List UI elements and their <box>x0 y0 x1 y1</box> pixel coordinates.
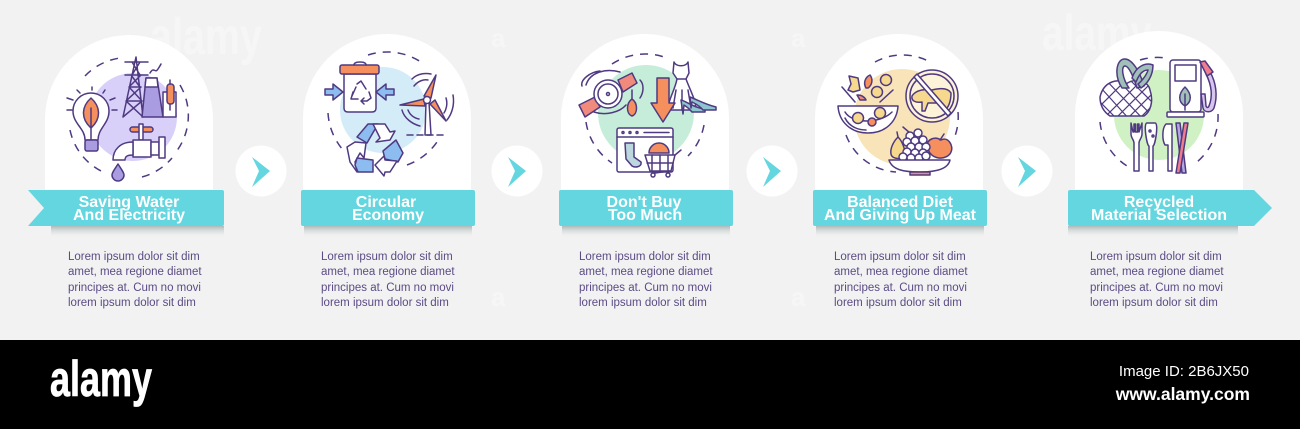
ribbon <box>813 190 987 226</box>
panel: don't buy too much <box>559 34 733 309</box>
arch card <box>561 34 729 192</box>
ribbon shadow <box>562 226 730 238</box>
heading: Saving Water <box>79 194 179 211</box>
description: principes at. Cum no movi <box>68 282 201 294</box>
icon: salad, no meat, fruit <box>838 55 958 175</box>
description: lorem ipsum dolor sit dim <box>579 297 707 309</box>
ribbon <box>1068 190 1272 226</box>
panel: recycled material selection <box>1068 31 1272 309</box>
arrow 4 <box>1002 146 1052 196</box>
description: Lorem ipsum dolor sit dim <box>834 251 966 263</box>
description: Lorem ipsum dolor sit dim <box>1090 251 1222 263</box>
arch card <box>1075 31 1243 192</box>
site url: www.alamy.com <box>1115 384 1250 404</box>
description: lorem ipsum dolor sit dim <box>834 297 962 309</box>
watermarks: a <box>791 23 806 53</box>
footer bar <box>0 340 1300 429</box>
description: principes at. Cum no movi <box>321 282 454 294</box>
description: lorem ipsum dolor sit dim <box>1090 297 1218 309</box>
description: amet, mea regione diamet <box>321 266 455 278</box>
description: lorem ipsum dolor sit dim <box>68 297 196 309</box>
ribbon <box>559 190 733 226</box>
description: Lorem ipsum dolor sit dim <box>321 251 453 263</box>
watermarks: a <box>491 23 506 53</box>
ribbon shadow <box>1068 226 1238 238</box>
arrow 2 <box>492 146 542 196</box>
description: amet, mea regione diamet <box>68 266 202 278</box>
heading: And Electricity <box>73 207 185 224</box>
arch card <box>45 35 213 192</box>
ribbon shadow <box>304 226 472 238</box>
description: amet, mea regione diamet <box>1090 266 1224 278</box>
heading: Too Much <box>608 207 682 224</box>
watermarks: a <box>791 282 806 312</box>
arrow 3 <box>746 146 798 196</box>
description: principes at. Cum no movi <box>579 282 712 294</box>
description: Lorem ipsum dolor sit dim <box>68 251 200 263</box>
heading: Balanced Diet <box>847 194 954 211</box>
arrow 1 <box>236 146 286 196</box>
ribbon <box>28 190 224 226</box>
description: Lorem ipsum dolor sit dim <box>579 251 711 263</box>
panel: saving water and electricity <box>28 35 224 309</box>
panel: circular economy <box>301 34 475 309</box>
logo: alamy <box>50 351 152 407</box>
description: principes at. Cum no movi <box>1090 282 1223 294</box>
arch card <box>815 34 983 192</box>
heading: Recycled <box>1124 194 1194 211</box>
watermarks: a <box>491 282 506 312</box>
icon: watch, dress, arrow, online shop <box>579 54 716 177</box>
panel: balanced diet <box>813 34 987 309</box>
watermarks: alamy <box>150 8 262 66</box>
ribbon shadow <box>51 226 224 238</box>
heading: Material Selection <box>1091 207 1227 224</box>
description: principes at. Cum no movi <box>834 282 967 294</box>
description: amet, mea regione diamet <box>834 266 968 278</box>
watermarks <box>150 5 1152 312</box>
image id: Image ID: 2B6JX50 <box>1119 363 1249 380</box>
heading: Economy <box>352 207 424 224</box>
heading: And Giving Up Meat <box>824 207 977 224</box>
icon: bulb, tower, factory, tap <box>67 57 188 181</box>
heading: Circular <box>356 194 416 211</box>
icon: bin, turbine, recycling <box>325 52 454 176</box>
arch card <box>303 34 471 192</box>
description: lorem ipsum dolor sit dim <box>321 297 449 309</box>
icon: net bag, fuel pump, cutlery <box>1090 57 1218 173</box>
heading: Don't Buy <box>607 194 682 211</box>
watermarks: alamy <box>1042 5 1152 61</box>
ribbon shadow <box>816 226 984 238</box>
ribbon <box>301 190 475 226</box>
description: amet, mea regione diamet <box>579 266 713 278</box>
